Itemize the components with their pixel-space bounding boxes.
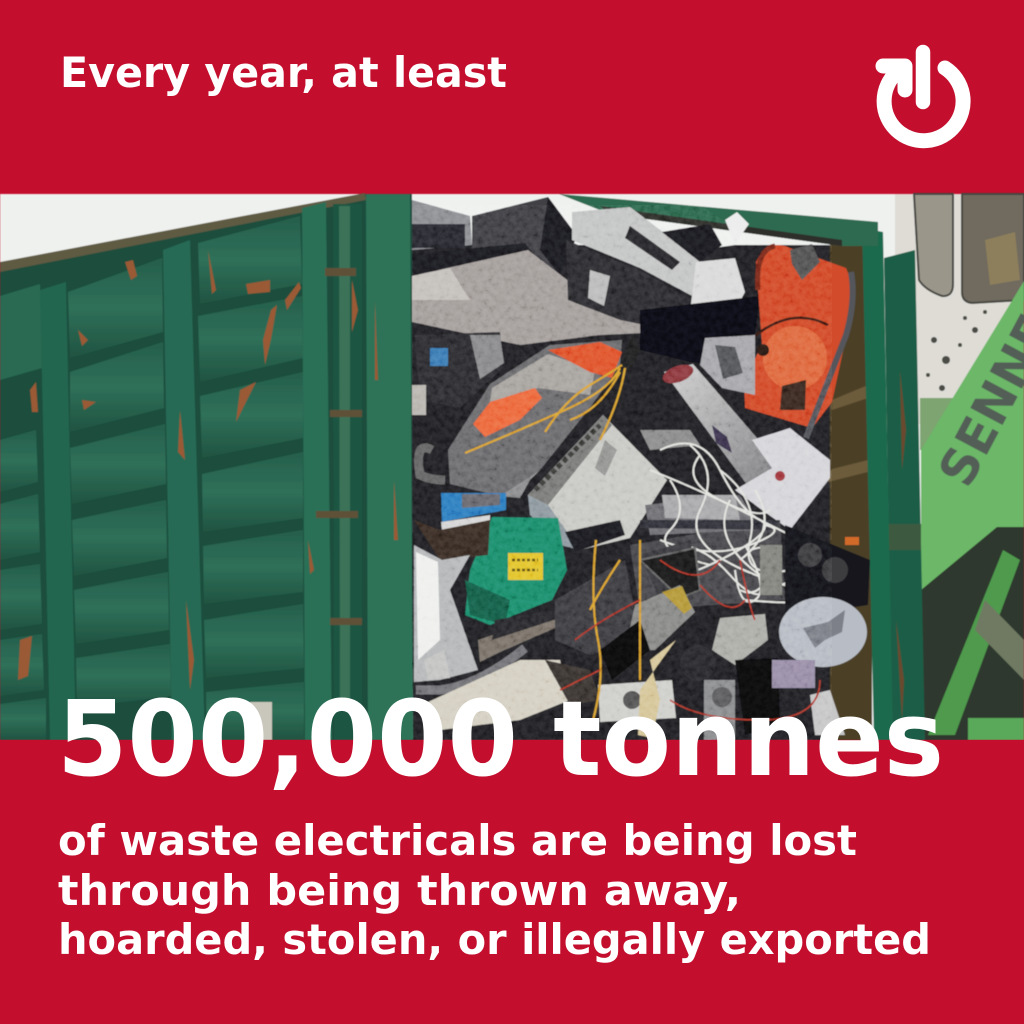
white block xyxy=(690,258,745,336)
top-left grey device xyxy=(412,200,472,250)
orange vacuum cleaner xyxy=(744,244,853,438)
laptop lid xyxy=(412,243,532,276)
yellow wires xyxy=(465,365,640,730)
bottom red banner xyxy=(0,740,1024,1024)
icon: power button with refresh arrow xyxy=(883,52,963,141)
right door of skip xyxy=(884,250,925,740)
printer xyxy=(572,207,706,298)
green device with yellow label xyxy=(465,517,567,625)
grey hose and white crumpled plastic xyxy=(416,648,600,730)
blue item xyxy=(441,493,506,522)
foil xyxy=(700,335,755,395)
heading: every year: Every year, at least xyxy=(60,48,507,97)
keyboard grate xyxy=(640,548,700,598)
vertical ribs xyxy=(163,240,205,740)
green boom arm with lettering xyxy=(921,281,1024,740)
black box xyxy=(472,197,577,276)
desk fan xyxy=(779,597,867,667)
skip interior and door post xyxy=(412,194,893,740)
white vacuum body xyxy=(735,428,830,530)
silver cyclone cylinder xyxy=(600,585,768,681)
white wire bundle xyxy=(650,443,811,602)
corrugated panels column 1 xyxy=(0,284,42,380)
grey steel box xyxy=(528,415,667,552)
sky xyxy=(0,194,1024,740)
body text: through being thrown away, xyxy=(58,866,741,915)
black speaker box xyxy=(785,525,870,618)
bottom white device xyxy=(598,680,676,722)
grey and orange mower xyxy=(418,335,640,498)
e-waste pile xyxy=(412,197,870,740)
grey clutter behind wires xyxy=(630,520,785,610)
silver vacuum canister xyxy=(664,364,783,486)
photo: skip full of electrical waste xyxy=(0,193,1024,740)
big number: 500,000 tonnes: 500,000 tonnes xyxy=(57,678,944,800)
black plastic mass xyxy=(640,296,760,372)
body text xyxy=(58,816,931,964)
brown item xyxy=(414,520,490,560)
corrugated panels column 3 xyxy=(198,216,302,304)
photo grain texture xyxy=(412,200,832,740)
dark barrel vacuum xyxy=(414,332,503,408)
white frame appliance left xyxy=(414,545,478,682)
top red banner xyxy=(0,0,1024,194)
left skip wall xyxy=(0,193,413,740)
truck cab xyxy=(895,194,1024,450)
body text: of waste electricals are being lost xyxy=(58,816,857,865)
grey tablet xyxy=(478,612,562,662)
dark slab xyxy=(555,560,640,655)
red wires xyxy=(560,560,820,720)
black part above printer xyxy=(662,224,722,262)
corrugated panels column 2 xyxy=(68,258,163,358)
flat device bottom of tangle xyxy=(662,495,740,520)
bottom silver tray and black box xyxy=(704,680,735,740)
body text: hoarded, stolen, or illegally exported xyxy=(58,915,931,964)
rust marks xyxy=(18,250,398,690)
